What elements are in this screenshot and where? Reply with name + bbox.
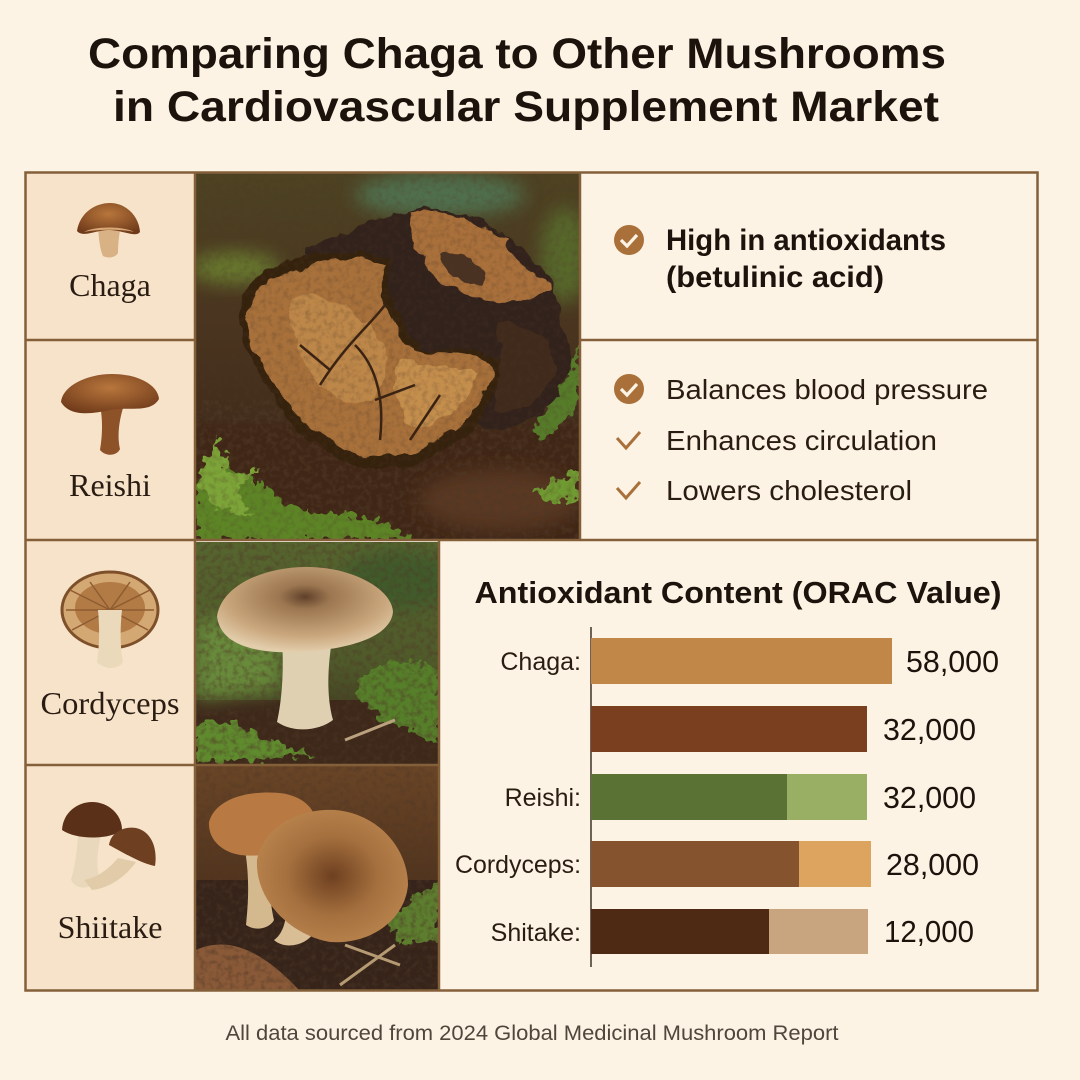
bar row: Cordyceps: [455, 841, 979, 887]
bar row: Reishi: 32,000: [883, 780, 976, 815]
text: high in antioxidants: [666, 224, 946, 294]
bar row: Shiitake: [491, 909, 974, 954]
panel: feature one: [614, 224, 946, 294]
label: Chaga: Chaga: [69, 267, 151, 303]
bar row: Cordyceps: Cordyceps:: [455, 851, 581, 879]
panel: mushroom name cells: [26, 173, 195, 990]
bar row: Shiitake: 12,000: [884, 914, 974, 949]
mushroom: [277, 640, 333, 729]
icon: chaga mushroom: [77, 203, 140, 257]
bar row: Chaga: Chaga:: [500, 648, 581, 676]
bar row: Reishi: [505, 774, 976, 820]
bar row: Cordyceps: 28,000: [886, 847, 979, 882]
chart title: Antioxidant Content (ORAC Value): [474, 575, 1002, 610]
icon: shiitake mushrooms: [62, 802, 156, 890]
icon: check: [617, 482, 640, 498]
fungus: [238, 208, 568, 469]
title: in Cardiovascular Supplement Market: [113, 83, 939, 131]
bar row: Reishi: Reishi:: [505, 784, 581, 812]
icon: filled check badge: [614, 225, 644, 255]
text: balances blood pressure: Balances blood pressure: [666, 374, 988, 405]
grid lines: [25, 172, 1038, 990]
cell: Chaga: [69, 203, 151, 303]
photo: shiitake: [196, 766, 439, 991]
text: lowers cholesterol: Lowers cholesterol: [666, 475, 912, 506]
icon: reishi mushroom: [61, 374, 159, 455]
photo: chaga: [190, 173, 590, 540]
bar chart: antioxidant content: [455, 575, 1002, 967]
bar row: unlabeled: 32,000: [883, 712, 976, 747]
axis: [590, 627, 592, 967]
cell: Cordyceps: [40, 572, 180, 721]
label: Reishi: Reishi: [69, 467, 151, 503]
text: high in antioxidants: (betulinic acid): [666, 261, 884, 294]
icon: filled check badge: [614, 374, 644, 404]
cell: Reishi: [61, 374, 159, 503]
label: Cordyceps: Cordyceps: [40, 685, 180, 721]
moss: [196, 340, 580, 540]
panel: feature list: [614, 374, 988, 506]
bar row: unlabeled: [591, 706, 976, 752]
bar row: Chaga: 58,000: [906, 644, 999, 679]
text: high in antioxidants: High in antioxidants: [666, 224, 946, 257]
icon: cordyceps mushroom: [62, 572, 158, 668]
cell: Shiitake: [58, 802, 162, 945]
label: Shiitake: Shiitake: [58, 909, 162, 945]
icon: check: [617, 432, 640, 448]
footer source note: All data sourced from 2024 Global Medicinal Mushroom Report: [226, 1022, 839, 1045]
bar row: Shiitake: Shitake:: [491, 919, 581, 947]
title: Comparing Chaga to Other Mushrooms: [88, 30, 946, 78]
text: enhances circulation: Enhances circulation: [666, 425, 937, 456]
title: [88, 30, 946, 131]
photo: cordyceps: [196, 542, 460, 764]
bar row: Chaga: [500, 638, 999, 684]
